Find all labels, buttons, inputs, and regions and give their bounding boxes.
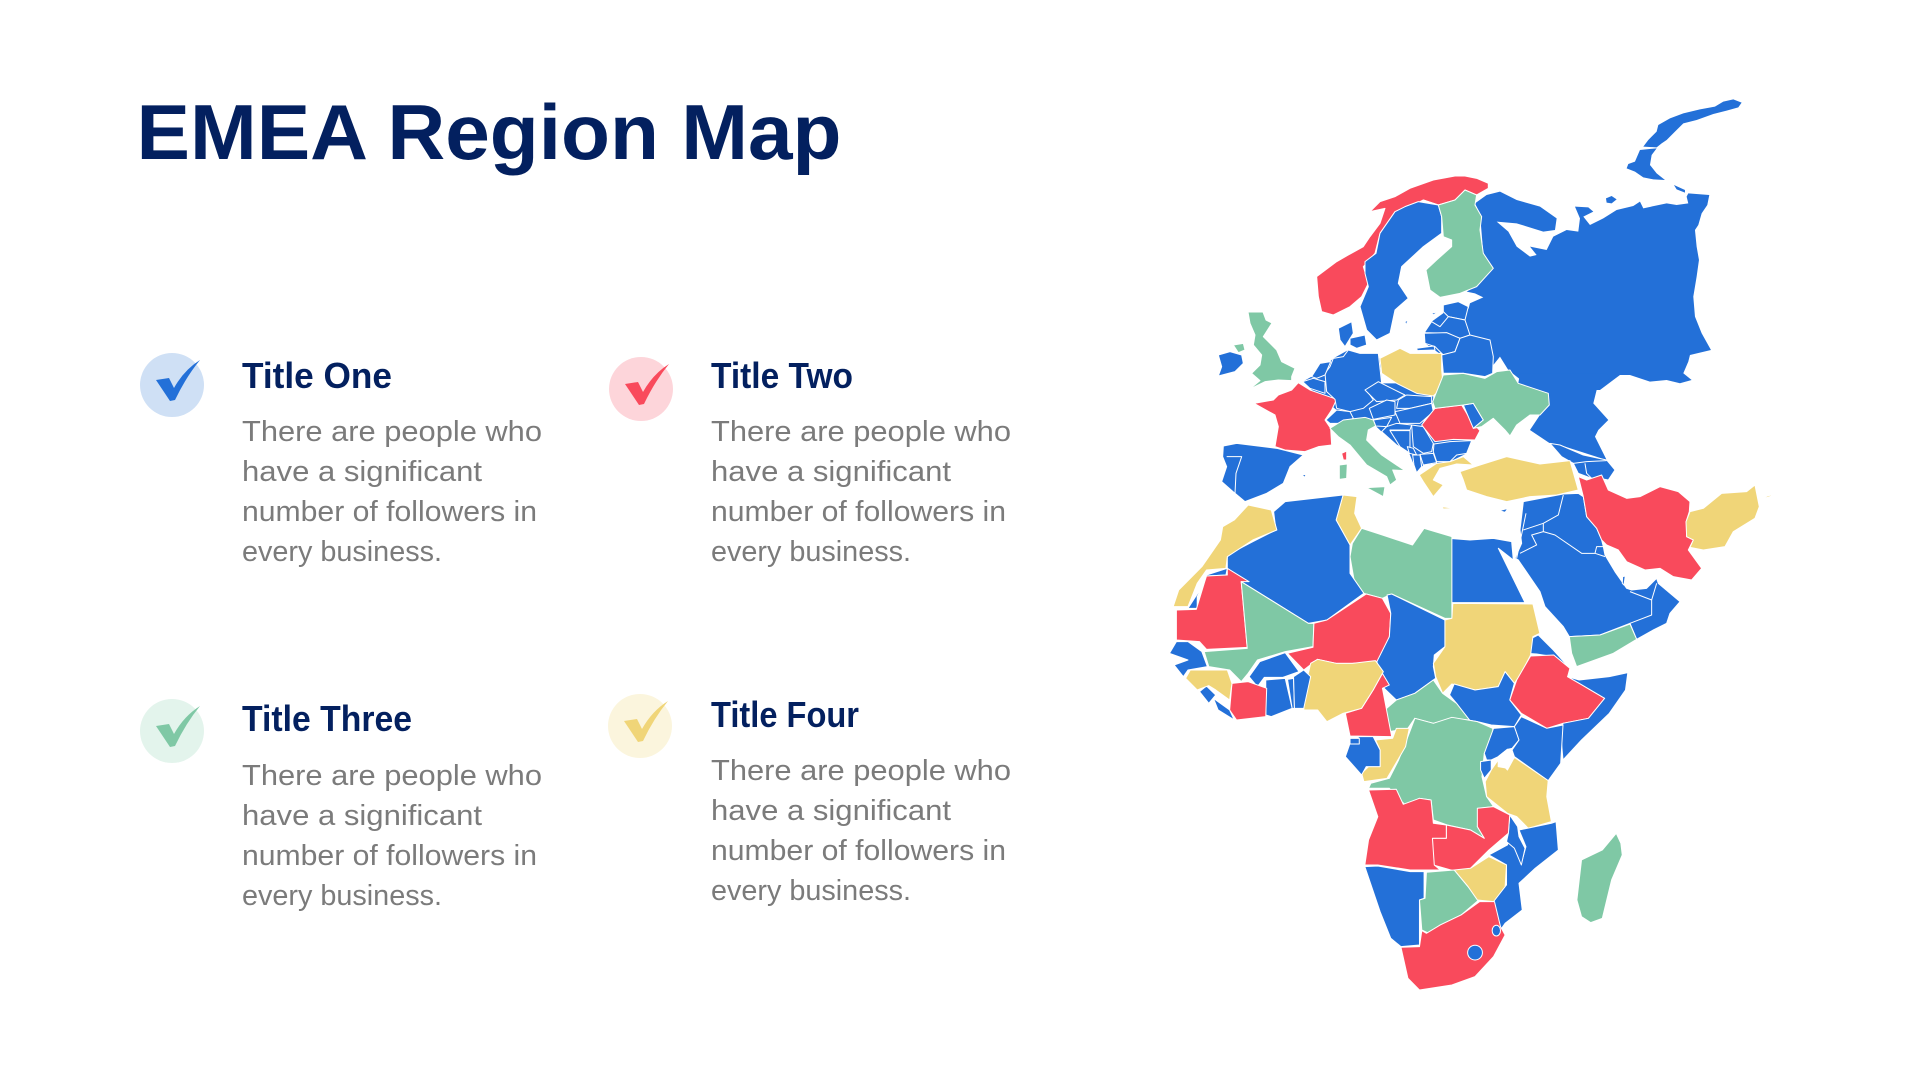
South Africa bbox=[1401, 902, 1505, 990]
Baltic land backing bbox=[1425, 305, 1493, 373]
Congo bbox=[1362, 728, 1409, 782]
text: description three: have a significant bbox=[242, 800, 482, 832]
Hungary bbox=[1395, 403, 1433, 423]
Estonia bbox=[1443, 302, 1468, 320]
map: Africa bbox=[1169, 495, 1628, 990]
Cameroon bbox=[1345, 673, 1392, 737]
Lesotho bbox=[1468, 945, 1482, 960]
panel: title two bbox=[609, 355, 1011, 568]
text: description three: every business. bbox=[242, 880, 442, 912]
Niger bbox=[1288, 594, 1391, 670]
Eswatini bbox=[1492, 925, 1500, 936]
Eritrea bbox=[1527, 635, 1568, 667]
Slovenia bbox=[1373, 417, 1392, 427]
text: description three: There are people who bbox=[242, 760, 542, 792]
Angola bbox=[1365, 789, 1446, 870]
Slovakia bbox=[1397, 395, 1432, 408]
Sicily bbox=[1367, 487, 1385, 497]
Belarus bbox=[1442, 335, 1493, 377]
Central Europe land backing bbox=[1367, 383, 1472, 473]
Bulgaria bbox=[1433, 441, 1472, 462]
France bbox=[1254, 383, 1337, 452]
DR Congo bbox=[1369, 717, 1494, 838]
map: Russia and Nordic countries bbox=[1317, 99, 1742, 390]
Serbia bbox=[1412, 425, 1433, 453]
Lake Victoria bbox=[1498, 749, 1513, 768]
text: description four bbox=[711, 755, 1011, 907]
panel: title three bbox=[140, 698, 542, 912]
Ghana, Togo and Benin bbox=[1266, 678, 1292, 717]
Zambia bbox=[1432, 807, 1510, 872]
Egypt bbox=[1449, 538, 1525, 603]
text: description two: every business. bbox=[711, 536, 911, 568]
title: EMEA Region Map bbox=[136, 88, 842, 176]
Albania bbox=[1413, 455, 1422, 473]
Ivory Coast bbox=[1230, 682, 1267, 720]
Uganda bbox=[1484, 727, 1519, 760]
icon: blue check bbox=[140, 353, 204, 417]
Somalia bbox=[1561, 673, 1628, 760]
map: Middle East bbox=[1449, 475, 1778, 667]
Russia south and Caucasus bbox=[1518, 373, 1610, 460]
Sardinia bbox=[1339, 464, 1347, 479]
Central African Republic bbox=[1385, 680, 1469, 732]
Ethiopia bbox=[1510, 655, 1605, 728]
Sudan bbox=[1433, 603, 1540, 693]
map: Western and Southern Europe bbox=[1218, 312, 1615, 512]
text: description two: number of followers in bbox=[711, 496, 1006, 528]
Russia north bbox=[1467, 99, 1742, 390]
Arabian Peninsula and Levant bbox=[1515, 493, 1680, 639]
icon: red check bbox=[609, 357, 673, 421]
text: description four: There are people who bbox=[711, 755, 1011, 787]
Netherlands bbox=[1312, 362, 1331, 378]
heading: title three: Title Three bbox=[242, 698, 412, 739]
Zimbabwe bbox=[1454, 857, 1507, 902]
Austria bbox=[1369, 400, 1395, 419]
heading: title four: Title Four bbox=[711, 694, 859, 735]
Spain and Portugal bbox=[1222, 443, 1303, 502]
Belgium bbox=[1303, 378, 1325, 393]
Afghanistan bbox=[1686, 485, 1759, 550]
North Macedonia bbox=[1420, 453, 1437, 465]
Namibia bbox=[1365, 866, 1424, 947]
Greece bbox=[1419, 457, 1473, 497]
text: description three bbox=[242, 760, 542, 912]
Chad bbox=[1377, 594, 1445, 700]
panel: title four bbox=[608, 694, 1011, 907]
text: description one: number of followers in bbox=[242, 496, 537, 528]
Kaliningrad bbox=[1417, 346, 1435, 351]
Turkey bbox=[1460, 457, 1578, 502]
heading: title one: Title One bbox=[242, 355, 392, 396]
Gabon bbox=[1345, 737, 1380, 775]
Lithuania bbox=[1424, 333, 1460, 355]
Rwanda and Burundi bbox=[1481, 760, 1491, 778]
text: description one bbox=[242, 416, 542, 568]
Romania bbox=[1422, 405, 1480, 442]
Montenegro bbox=[1407, 447, 1417, 455]
Moldova bbox=[1463, 403, 1483, 428]
Guinea bbox=[1186, 670, 1232, 700]
Germany bbox=[1325, 350, 1382, 412]
Baltic islands bbox=[1405, 312, 1438, 325]
text: description two bbox=[711, 416, 1011, 568]
text: description four: number of followers in bbox=[711, 835, 1006, 867]
Libya bbox=[1350, 528, 1452, 618]
text: description two: have a significant bbox=[711, 456, 951, 488]
South Sudan bbox=[1450, 672, 1521, 727]
Finland bbox=[1423, 190, 1493, 297]
Norway bbox=[1317, 176, 1488, 315]
Nigeria bbox=[1304, 659, 1383, 722]
Bosnia bbox=[1390, 431, 1410, 453]
Liberia bbox=[1213, 698, 1234, 720]
text: description four: every business. bbox=[711, 875, 911, 907]
text: description one: There are people who bbox=[242, 416, 542, 448]
text: description one: every business. bbox=[242, 536, 442, 568]
Tanzania bbox=[1485, 757, 1551, 828]
Botswana bbox=[1419, 870, 1479, 933]
United Kingdom bbox=[1248, 312, 1295, 389]
Croatia bbox=[1382, 423, 1412, 453]
Western Europe land backing bbox=[1303, 350, 1382, 420]
Sierra Leone bbox=[1200, 686, 1216, 703]
Crete bbox=[1442, 507, 1455, 509]
Burkina Faso bbox=[1249, 653, 1299, 687]
Ukraine bbox=[1433, 370, 1549, 436]
heading: title two: Title Two bbox=[711, 355, 853, 396]
Senegal bbox=[1169, 642, 1207, 677]
text: description two: There are people who bbox=[711, 416, 1011, 448]
Czechia bbox=[1365, 382, 1405, 402]
map: EMEA countries bbox=[1169, 99, 1778, 990]
text: description four: have a significant bbox=[711, 795, 951, 827]
text: description one: have a significant bbox=[242, 456, 482, 488]
icon: green check bbox=[140, 699, 204, 763]
Latvia bbox=[1425, 317, 1470, 338]
Yemen bbox=[1569, 624, 1637, 667]
text: description three: number of followers in bbox=[242, 840, 537, 872]
Morocco and Western Sahara bbox=[1173, 505, 1277, 607]
Corsica bbox=[1342, 451, 1347, 460]
Cyprus bbox=[1499, 508, 1508, 512]
Iran bbox=[1578, 475, 1702, 580]
Mauritania bbox=[1176, 568, 1249, 649]
Algeria bbox=[1227, 495, 1364, 623]
Denmark bbox=[1338, 322, 1367, 348]
Kenya bbox=[1512, 717, 1563, 781]
panel: title one bbox=[140, 353, 542, 568]
Northern Ireland bbox=[1233, 343, 1245, 353]
Madagascar bbox=[1577, 833, 1622, 923]
Poland bbox=[1380, 348, 1443, 396]
Sweden bbox=[1360, 202, 1442, 340]
Malawi bbox=[1507, 815, 1525, 865]
Balearic Islands bbox=[1302, 474, 1306, 477]
icon: yellow check bbox=[608, 694, 672, 758]
Mali bbox=[1204, 582, 1314, 682]
Ireland bbox=[1218, 352, 1243, 376]
Qatar bbox=[1622, 576, 1625, 585]
Switzerland bbox=[1326, 410, 1353, 423]
Italy bbox=[1330, 417, 1405, 485]
Mozambique bbox=[1489, 822, 1558, 930]
Tunisia bbox=[1336, 495, 1362, 545]
